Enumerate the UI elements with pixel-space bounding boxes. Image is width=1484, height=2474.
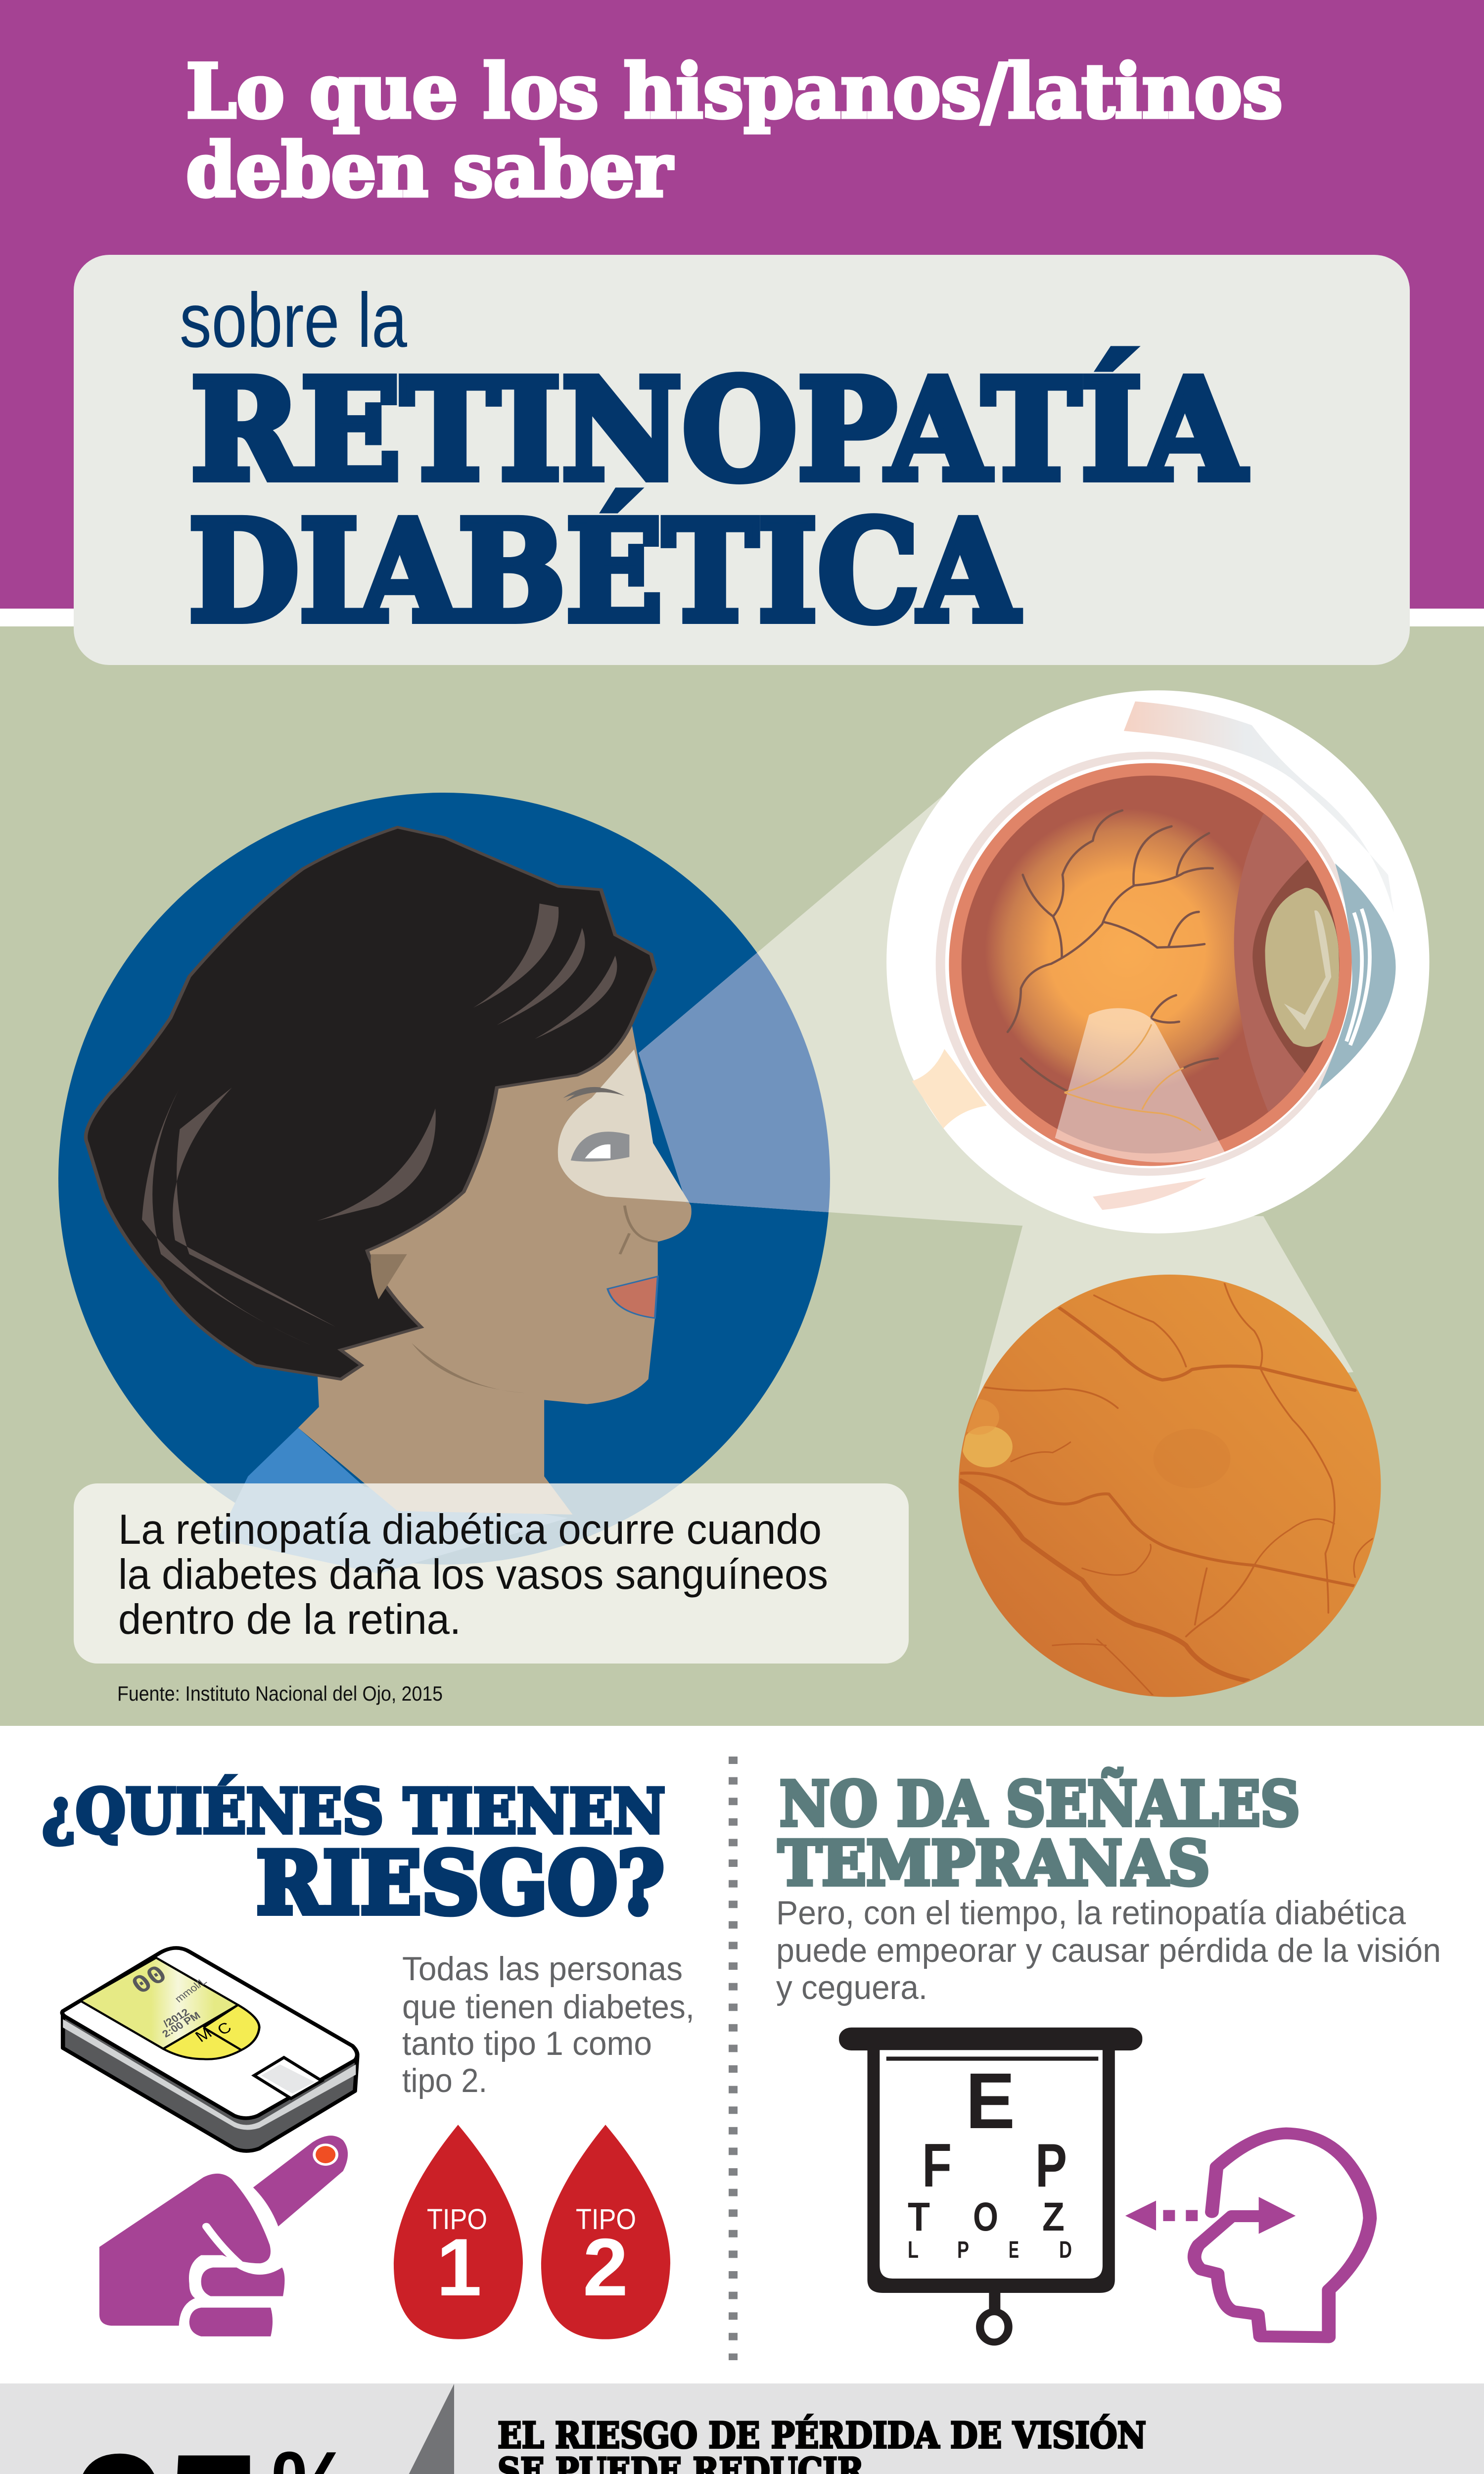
illustration: cross-section of the eye [886, 690, 1430, 1234]
heading: no da señales tempranas: TEMPRANAS [778, 1828, 1210, 1900]
text: all people with diabetes: tanto tipo 1 como [402, 2025, 652, 2062]
subheading: risk can be reduced: EL RIESGO DE PÉRDIDA DE VISIÓN [498, 2414, 1146, 2456]
heading: intro line: deben saber [186, 127, 673, 214]
text: all people with diabetes [402, 1950, 695, 2099]
callout: definition text box: la diabetes daña los vasos sanguíneos [118, 1551, 828, 1598]
icon: blood drop type 1 [394, 2125, 523, 2339]
chart letters: O [973, 2194, 998, 2239]
heading: intro line: Lo que los hispanos/latinos [186, 48, 1283, 135]
cutaway of retina [1055, 1008, 1225, 1162]
icon: blood drop type 2: 2 [583, 2222, 628, 2313]
eye muscles [912, 701, 1394, 1210]
text: over time [776, 1894, 1441, 2006]
icon: head looking with arrows [1125, 2133, 1370, 2337]
icon: blood drop type 1: 1 [436, 2222, 482, 2313]
title: retinopatía diabética: RETINOPATÍA [190, 348, 1248, 512]
source note: Fuente: Instituto Nacional del Ojo, 2015 [117, 1682, 443, 1705]
title: retinopatía diabética: DIABÉTICA [188, 490, 1020, 653]
text: over time: y ceguera. [776, 1969, 928, 2006]
column divider dots [729, 1757, 738, 2360]
retinal blood vessels [1008, 810, 1218, 1091]
chart letters: L [908, 2237, 919, 2263]
icon: blood drop type 2: TIPO [576, 2203, 636, 2236]
icon: blood drop type 2 [541, 2125, 670, 2339]
text: all people with diabetes: tipo 2. [402, 2062, 487, 2099]
meter labels [126, 1960, 234, 2046]
icon: glucose meter [62, 1948, 357, 2151]
meter labels: 2:00 PM [160, 2010, 203, 2040]
icon: purple hand with pricked finger [99, 2136, 348, 2336]
text: all people with diabetes: que tienen diabetes, [402, 1988, 695, 2026]
graphic: cone to retina photo [974, 1209, 1353, 1407]
subheading: risk can be reduced [498, 2414, 1146, 2474]
chart letters: P [1035, 2132, 1067, 2200]
panel: title card [74, 255, 1410, 665]
title: retinopatía diabética [188, 348, 1248, 653]
icon: blood drop type 1: TIPO [427, 2203, 487, 2236]
panel: 95 percent band [0, 2383, 1484, 2474]
graphic: translucent magnification cone [639, 795, 1048, 1226]
illustration: woman in profile [86, 827, 692, 1573]
chart letters: D [1059, 2237, 1072, 2263]
text: all people with diabetes: Todas las personas [402, 1950, 683, 1988]
heading: intro line [186, 48, 1283, 214]
panel: green illustration background [0, 626, 1484, 1726]
chart letters: E [966, 2056, 1015, 2145]
text: over time: Pero, con el tiempo, la retinopatía diabética [776, 1894, 1406, 1932]
heading: no da señales tempranas: NO DA SEÑALES [780, 1768, 1300, 1840]
heading: quiénes tienen riesgo: ¿QUIÉNES TIENEN [42, 1776, 665, 1848]
meter labels: mmol/L [173, 1975, 209, 2004]
chart letters [908, 2056, 1072, 2263]
heading: no da señales tempranas [778, 1768, 1300, 1900]
text: over time: puede empeorar y causar pérdida de la visión [776, 1932, 1441, 1969]
callout: definition text box: La retinopatía diabética ocurre cuando [118, 1506, 822, 1553]
panel: blue circle behind person [58, 793, 830, 1565]
chart letters: F [922, 2132, 952, 2200]
callout: definition text box [74, 1483, 909, 1664]
arrow: gray pointer [390, 2384, 454, 2474]
illustration: magnified woman's eye [558, 1049, 689, 1202]
heading: quiénes tienen riesgo [42, 1776, 665, 1933]
chart letters: T [908, 2194, 930, 2239]
callout: definition text box: dentro de la retina. [118, 1596, 461, 1643]
panel: purple header background [0, 0, 1484, 609]
icon: eye chart [839, 2028, 1142, 2342]
heading: quiénes tienen riesgo: RIESGO? [256, 1833, 664, 1933]
chart letters: Z [1042, 2194, 1065, 2239]
photo: retina fundus [958, 1275, 1381, 1697]
meter labels: M [192, 2024, 215, 2046]
chart letters: P [957, 2237, 969, 2263]
meter labels: 00 [126, 1960, 174, 2001]
meter labels: /2012 [161, 2006, 191, 2029]
panel: title card: sobre la [180, 278, 407, 364]
meter labels: C [214, 2019, 234, 2039]
chart letters: E [1009, 2237, 1019, 2263]
